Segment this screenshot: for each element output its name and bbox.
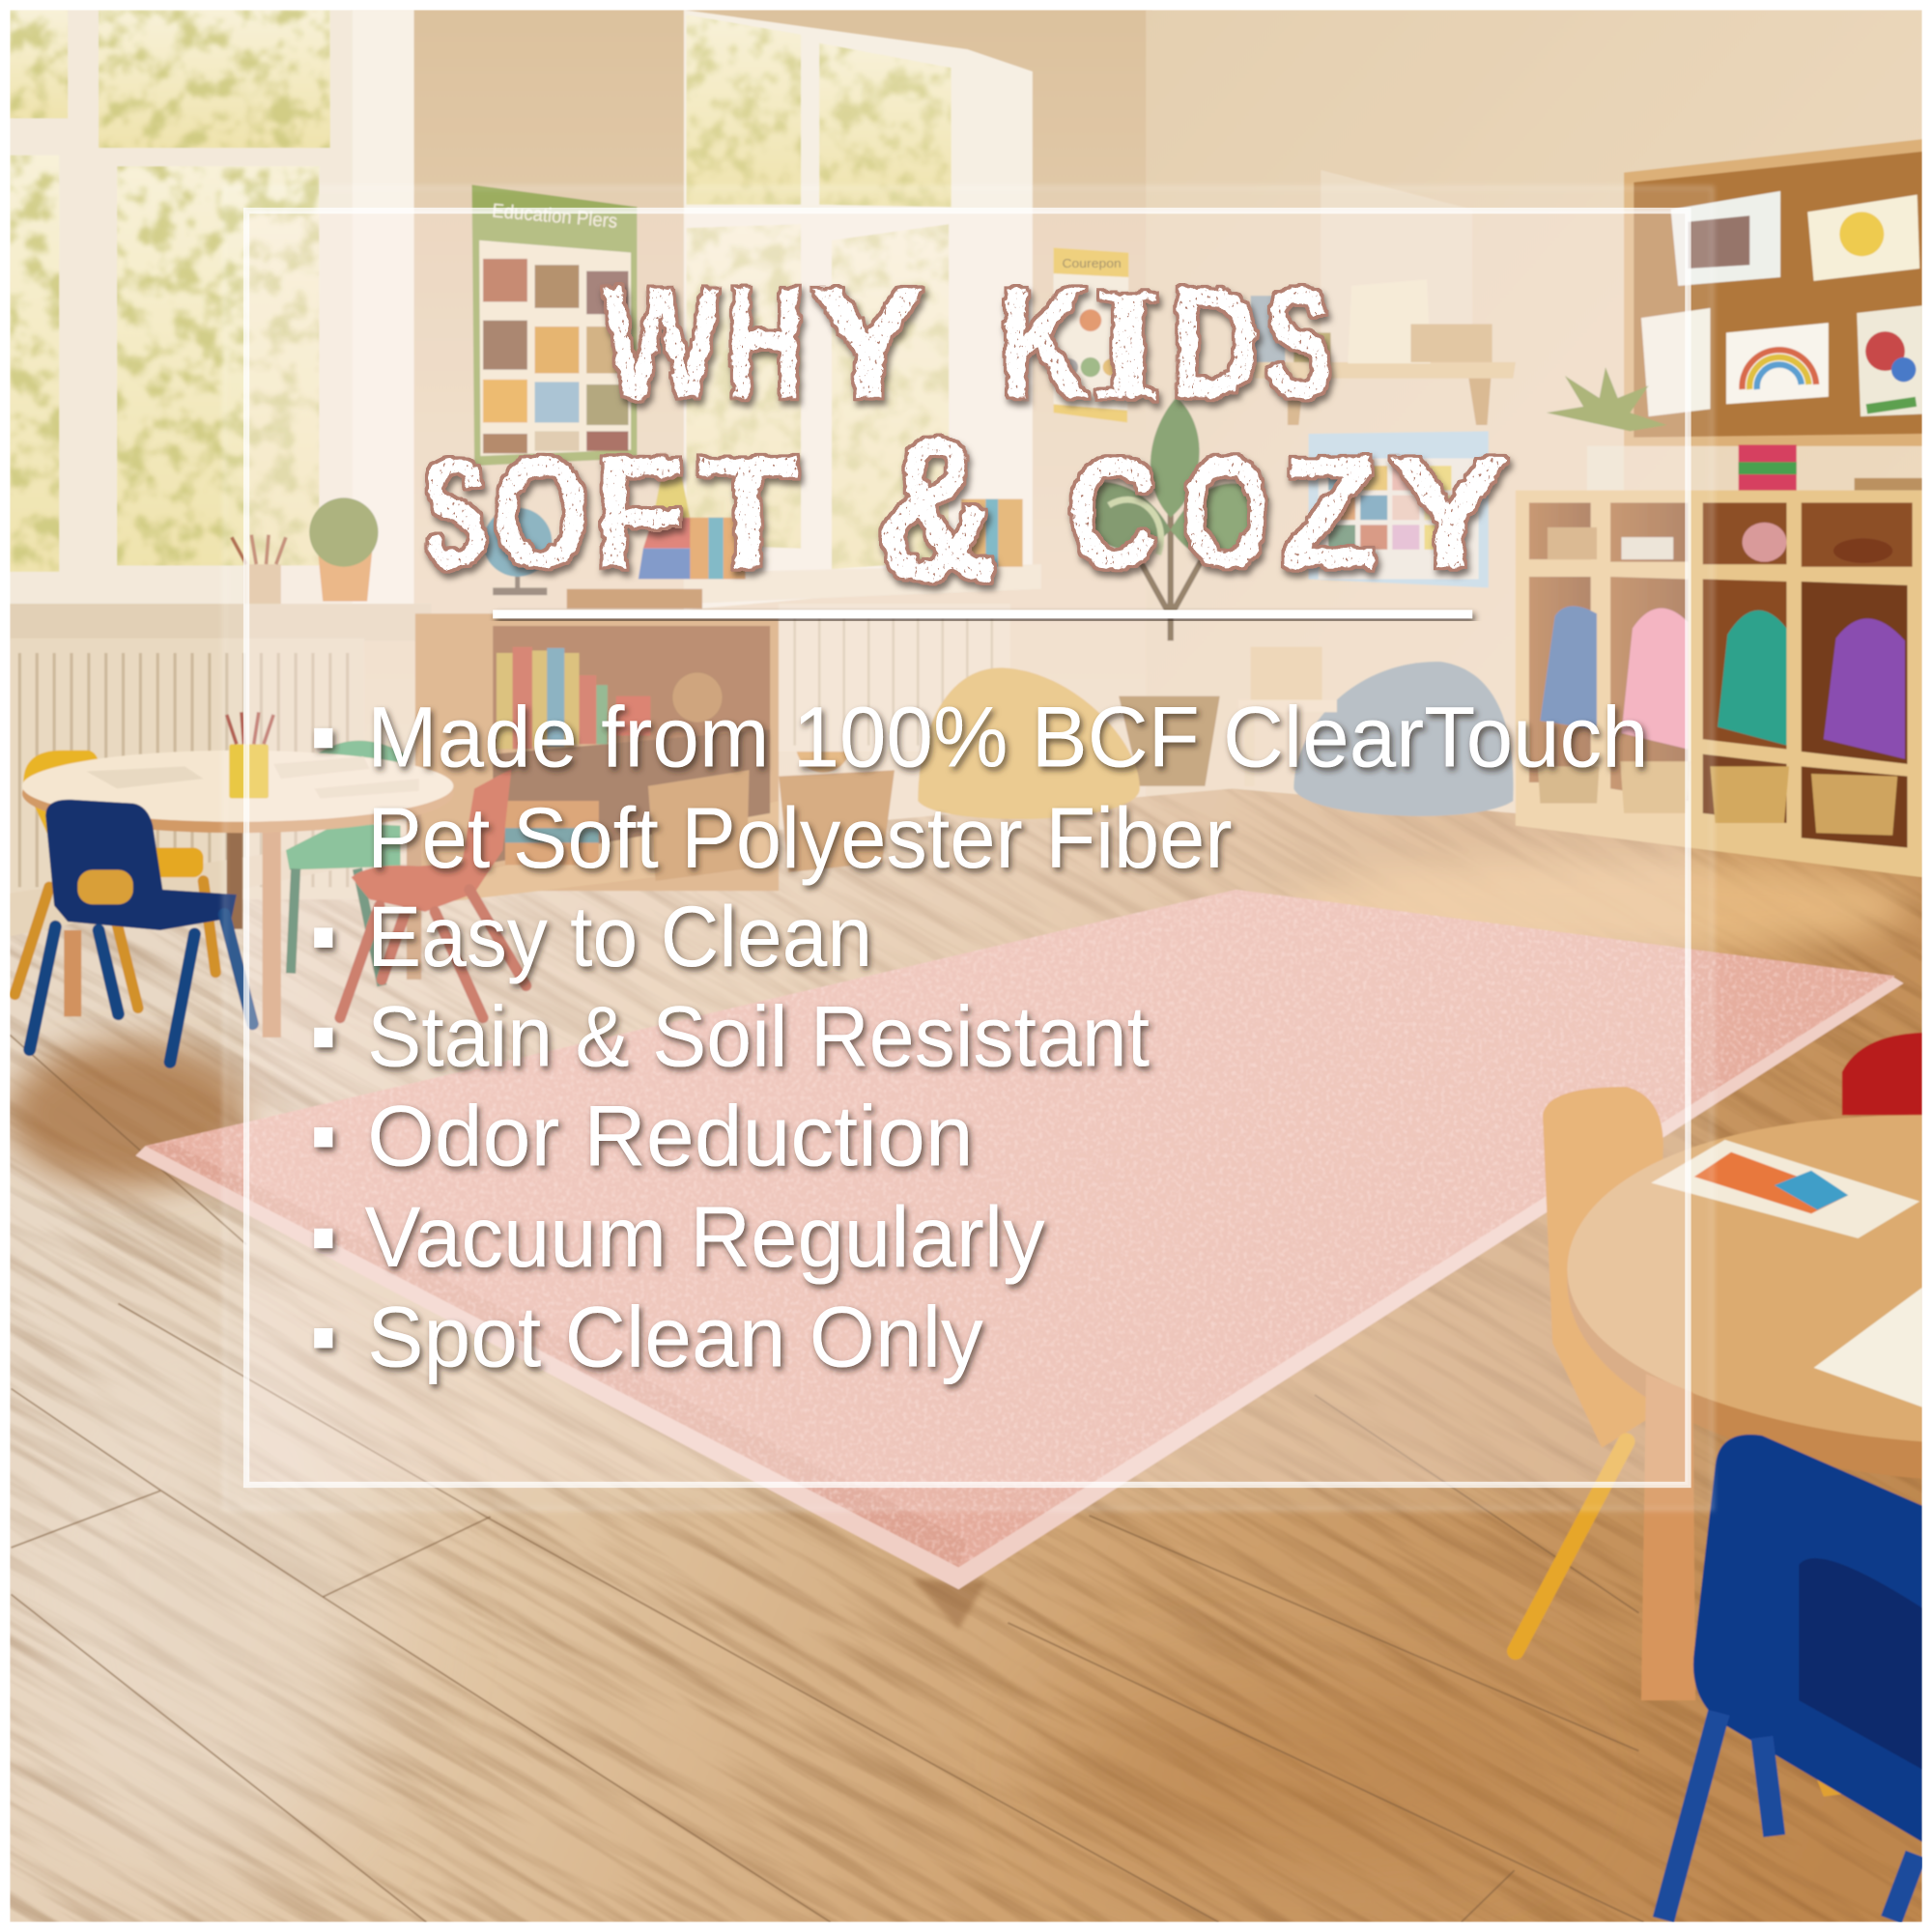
alphabet poster xyxy=(1309,431,1489,587)
feature: odor reduction: Odor Reduction xyxy=(367,1088,974,1184)
window sill plants xyxy=(232,497,379,604)
bean bags xyxy=(918,662,1514,819)
title line two: S xyxy=(423,424,487,601)
title line one: W xyxy=(603,254,721,431)
title line two: Y xyxy=(1389,424,1511,601)
title line two: T xyxy=(697,424,799,601)
potted plant xyxy=(1069,397,1269,786)
yellow wall poster xyxy=(1054,247,1128,423)
feature list xyxy=(314,688,1649,1385)
back wall left xyxy=(352,10,1152,897)
yellow wall poster: Courepon xyxy=(1062,256,1122,270)
side stool with toy xyxy=(1238,647,1337,786)
wall shelf xyxy=(1251,280,1516,425)
feature: stain resistant: Stain & Soil Resistant xyxy=(367,987,1150,1084)
left window xyxy=(10,10,431,640)
cubby shelves xyxy=(1516,491,1922,877)
feature: easy to clean: Easy to Clean xyxy=(367,888,872,984)
title line two: O xyxy=(1181,424,1270,601)
backpacks xyxy=(1540,607,1905,759)
title line one: I xyxy=(1093,258,1163,432)
low shelf with books xyxy=(415,613,895,906)
radiator middle xyxy=(779,604,1010,752)
feature: BCF fiber xyxy=(314,688,1649,886)
title line one: K xyxy=(999,254,1088,431)
title line one: Y xyxy=(810,254,927,431)
floor wood grain xyxy=(10,788,1922,1922)
left table with chairs xyxy=(14,712,526,1062)
back wall right xyxy=(1146,10,1922,897)
title line two: O xyxy=(493,424,589,601)
wall corner highlight xyxy=(1321,170,1472,370)
feature: spot clean only: Spot Clean Only xyxy=(367,1289,983,1385)
title line one: H xyxy=(727,254,804,431)
floor lighting xyxy=(6,856,1910,1873)
title xyxy=(423,254,1511,622)
feature: vacuum regularly: Vacuum Regularly xyxy=(365,1188,1045,1285)
floor board lines xyxy=(10,1035,1644,1922)
title line two: & xyxy=(876,394,997,622)
small plant and toy tower xyxy=(1547,367,1922,492)
window-sill toys: globe and ring tower xyxy=(483,469,1023,609)
radiator left xyxy=(10,639,370,936)
title line two: F xyxy=(594,424,685,601)
feature: BCF fiber: Made from 100% BCF ClearTouch xyxy=(367,688,1649,784)
title underline xyxy=(493,610,1472,618)
title line one: D xyxy=(1171,254,1260,431)
title line one: S xyxy=(1265,254,1332,431)
rug xyxy=(124,863,1910,1629)
right table and chairs xyxy=(1516,1033,1922,1919)
feature: BCF fiber: Pet Soft Polyester Fiber xyxy=(367,789,1233,886)
floor xyxy=(10,788,1922,1922)
education poster xyxy=(472,185,637,466)
translucent panel: inner card xyxy=(246,211,1688,1485)
title line two: Z xyxy=(1279,424,1378,601)
poster title: Education Plers xyxy=(491,201,618,233)
title line two: C xyxy=(1068,424,1158,601)
corkboard xyxy=(1624,139,1922,446)
translucent panel: outer band xyxy=(224,187,1713,1509)
baskets xyxy=(1538,761,1897,836)
middle window xyxy=(684,10,1041,610)
